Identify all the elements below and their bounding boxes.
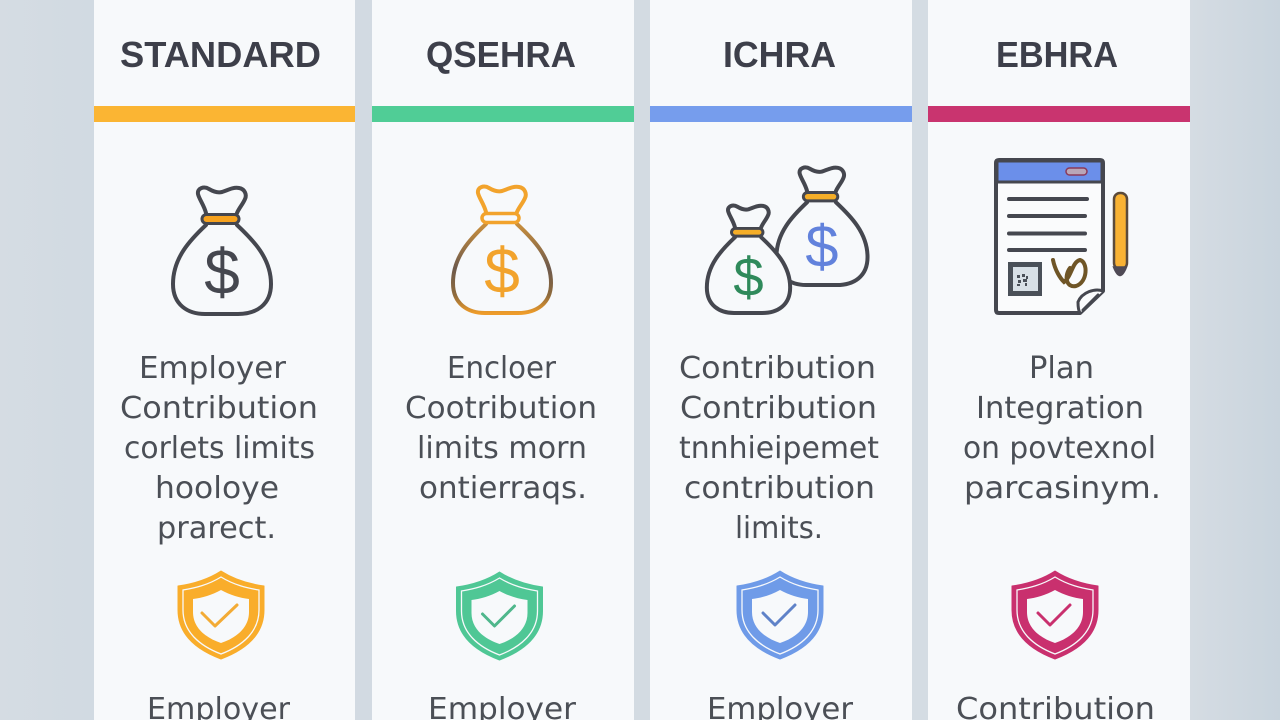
icon: money bag xyxy=(173,188,271,314)
accent bar: green xyxy=(372,106,634,122)
text block: qsehra description: Cootribution xyxy=(405,391,597,426)
text block: qsehra description: ontierraqs. xyxy=(419,471,587,506)
icon: green dollar bag xyxy=(707,206,790,313)
text block: qsehra description: limits morn xyxy=(417,431,587,466)
text block: standard description xyxy=(120,351,318,546)
accent bar: orange xyxy=(94,106,355,122)
panel: ichra xyxy=(650,0,912,720)
icon: gold money bag xyxy=(453,187,551,313)
icon: blue shield xyxy=(737,571,823,659)
text block: qsehra description xyxy=(405,351,597,506)
heading: ichra: ICHRA xyxy=(723,34,836,75)
text block: ichra description: contribution xyxy=(684,471,875,506)
text block: ichra description xyxy=(679,351,879,546)
text block: ebhra description xyxy=(963,351,1161,506)
text block: ichra description: Contribution xyxy=(679,351,876,386)
icon: orange shield xyxy=(178,571,264,659)
heading: ebhra: EBHRA xyxy=(996,34,1118,75)
accent bar: blue xyxy=(650,106,912,122)
heading: qsehra: QSEHRA xyxy=(426,34,576,75)
text block: standard description: prarect. xyxy=(157,511,276,546)
icon: gold money bag: $ xyxy=(484,235,520,307)
icon: green dollar bag: $ xyxy=(733,247,764,308)
icon: blue dollar bag xyxy=(776,167,868,285)
icon: signed document and pencil xyxy=(996,160,1127,313)
text block: qsehra description: Encloer xyxy=(447,351,557,386)
text block: standard description: corlets limits xyxy=(124,431,315,466)
text block: ichra description: tnnhieipemet xyxy=(679,431,879,466)
heading: standard: STANDARD xyxy=(120,34,321,75)
text block: standard description: Employer xyxy=(139,351,287,386)
text block: ichra description: limits. xyxy=(735,511,823,546)
icon: pink shield xyxy=(1012,571,1098,659)
text block: ebhra description: on povtexnol xyxy=(963,431,1156,466)
text block: ebhra description: Integration xyxy=(976,391,1144,426)
icon: money bag: $ xyxy=(204,236,240,308)
panel: qsehra xyxy=(372,0,634,720)
text block: standard description: hooloye xyxy=(155,471,279,506)
panel: standard xyxy=(94,0,355,720)
icon: two money bags xyxy=(707,167,868,313)
accent bar: pink xyxy=(928,106,1190,122)
text block: ebhra description: Plan xyxy=(1029,351,1094,386)
text block: standard description: Contribution xyxy=(120,391,318,426)
panel: ebhra xyxy=(928,0,1190,720)
icon: green shield xyxy=(456,572,542,660)
text block: ebhra description: parcasinym. xyxy=(964,471,1161,506)
text block: ichra description: Contribution xyxy=(680,391,877,426)
icon: blue dollar bag: $ xyxy=(805,212,839,279)
